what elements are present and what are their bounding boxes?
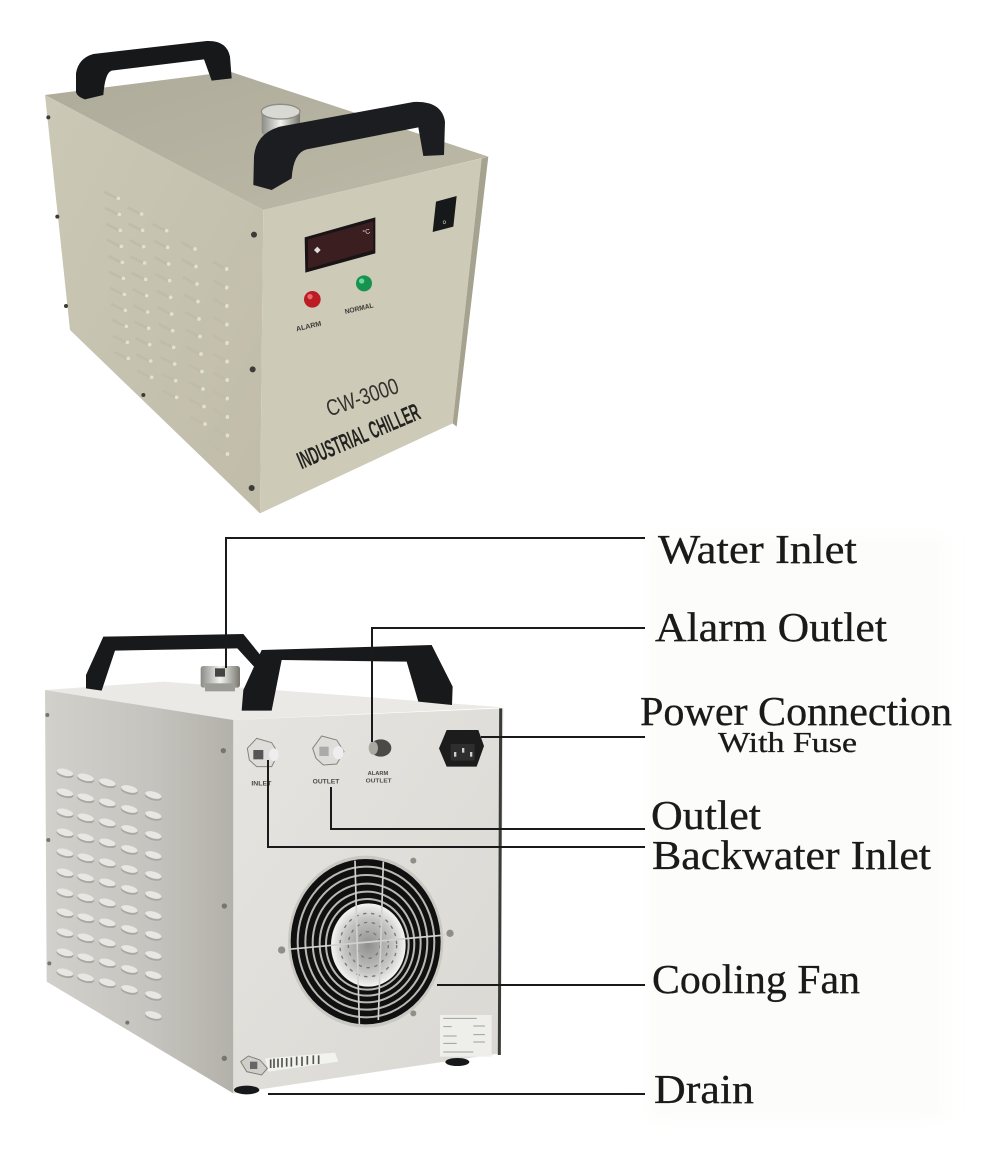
label: Alarm Outlet: Alarm Outlet [655,604,888,650]
front handle [253,102,445,190]
alarm lamp [304,291,321,308]
top panel [45,682,503,720]
rear panel [233,708,503,1093]
drain valve [241,1056,267,1075]
left side panel with vents [45,690,233,1093]
right edge strip [453,157,488,427]
alarm outlet label: OUTLET [366,779,392,785]
label: Outlet: Outlet [651,792,762,838]
front panel [260,158,482,513]
label: Water Inlet: Water Inlet [658,526,858,572]
power socket [439,730,484,767]
label: Backwater Inlet: Backwater Inlet [652,832,932,878]
back handle [86,634,262,691]
cooling fan [278,856,454,1028]
right edge bar [499,708,501,1055]
inlet label: INLET [251,782,272,788]
rubber feet [234,1058,469,1094]
normal lamp [356,275,372,291]
outlet connector [313,736,344,765]
label: Drain: Drain [654,1066,754,1112]
water inlet fitting [201,666,240,691]
power switch: o [443,220,447,226]
label: With Fuse: With Fuse [718,728,857,759]
specification plate [440,1015,492,1057]
alarm outlet label: ALARM [368,771,389,777]
front handle [242,645,453,711]
faint label background [650,535,945,1120]
product photo: beige CW-3000 chiller, front view [45,41,488,513]
model name: CW-3000 [322,372,402,421]
leader lines [226,538,645,1094]
alarm label: ALARM [296,321,322,333]
label: Power Connection: Power Connection [640,688,952,734]
inlet connector [247,738,279,767]
barcode sticker [265,1053,338,1072]
left side panel with vents [45,95,263,513]
top panel [45,72,488,210]
outlet label: OUTLET [313,779,340,785]
product photo: grey chiller, rear view [45,634,503,1094]
alarm outlet label [366,771,392,785]
normal label: NORMAL [344,302,375,316]
digital temperature display: °C [362,227,371,237]
digital temperature display [305,217,375,273]
water inlet cap [261,104,300,135]
back handle [76,41,232,99]
label: Cooling Fan: Cooling Fan [652,956,860,1002]
product name: INDUSTRIAL CHILLER [293,399,424,475]
power switch [433,196,457,232]
alarm outlet connector [369,739,391,757]
